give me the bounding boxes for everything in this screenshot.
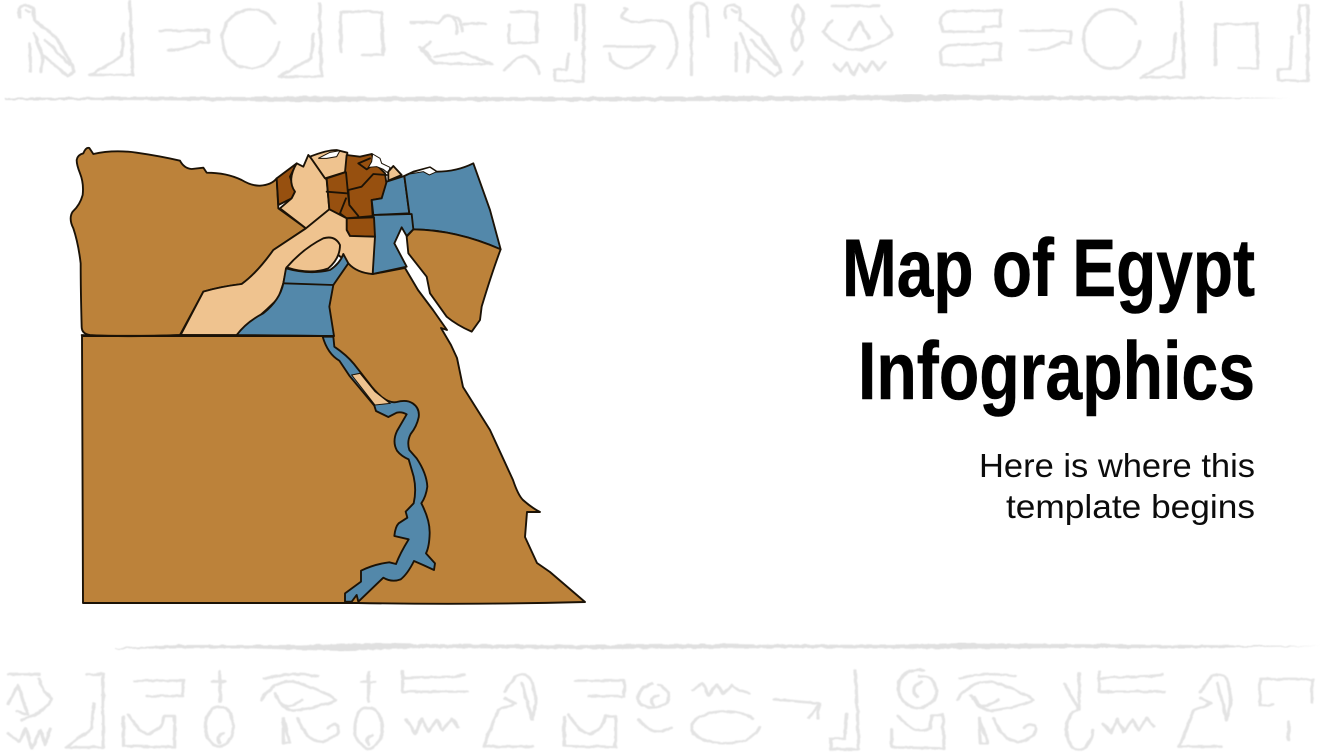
river Nile governorates	[323, 337, 435, 602]
lake	[318, 151, 340, 158]
title	[842, 223, 1255, 417]
map of Egypt	[71, 148, 585, 604]
region: Matrouh	[71, 148, 306, 336]
region: central delta	[327, 154, 387, 218]
region: South Sinai	[407, 229, 501, 332]
glyph: leg	[831, 670, 859, 749]
glyph: spiral and cup	[638, 683, 671, 731]
lagoon	[368, 154, 390, 173]
subtitle: template begins	[1006, 488, 1255, 525]
glyph: hand and boat	[411, 16, 492, 64]
glyph: leg	[90, 2, 133, 75]
glyph: box	[1260, 679, 1312, 740]
boundary line	[82, 335, 334, 336]
delta boundaries	[327, 158, 387, 218]
glyph: box and cup	[124, 681, 183, 747]
title: Infographics	[858, 326, 1255, 417]
region: Alexandria	[277, 163, 297, 205]
region: southern and eastern desert	[82, 263, 585, 604]
glyph: eye of Horus	[958, 674, 1036, 743]
hieroglyph band: bottom	[9, 670, 1312, 750]
glyph: vessel	[823, 6, 892, 75]
region: Beheira	[280, 155, 329, 228]
region: Kafr El Sheikh	[310, 150, 347, 178]
subtitle: Here is where this	[979, 447, 1255, 484]
glyph: column	[1278, 5, 1308, 81]
hieroglyph band: top	[19, 2, 1308, 82]
glyph: leg	[66, 674, 103, 747]
glyph: box and zigzag	[1099, 672, 1164, 733]
glyph: falcon	[19, 5, 75, 77]
glyph: leg	[1141, 2, 1184, 77]
glyph: braid	[792, 5, 803, 75]
lagoon	[407, 167, 437, 175]
glyph: box and cup	[564, 681, 624, 747]
glyph: arrow	[774, 699, 819, 718]
glyph: eye of Horus	[262, 674, 339, 743]
region: Giza	[181, 209, 375, 335]
region: Damietta	[388, 166, 402, 181]
glyph: snake and bowl	[605, 8, 677, 68]
glyph: zigzag and oval	[691, 683, 760, 743]
glyph: box and zigzag	[403, 672, 468, 733]
region: Cairo	[347, 217, 375, 237]
glyph: vessel	[9, 674, 52, 748]
glyph: reed and oval	[1064, 673, 1093, 750]
brush line: top	[5, 94, 1290, 102]
glyph: arm	[1021, 31, 1071, 50]
glyph: oval	[1084, 9, 1140, 68]
glyph: falcon	[726, 5, 781, 77]
subtitle	[979, 447, 1255, 525]
region: Sharqia	[372, 176, 409, 215]
glyph: leg	[279, 3, 322, 77]
region: Fayoum	[287, 237, 340, 271]
glyph: ankh	[205, 672, 233, 747]
region: Suez and Ismailia	[373, 214, 413, 274]
glyph: double mouth	[941, 10, 1000, 65]
glyph: ankh	[354, 672, 383, 749]
glyph: column	[555, 5, 584, 82]
region: North Sinai	[404, 163, 501, 249]
region: Beni Suef	[237, 254, 348, 336]
glyph: column	[691, 3, 708, 75]
glyph: box and arch	[505, 12, 539, 73]
glyph: box	[1215, 24, 1258, 68]
glyph: arm	[160, 31, 209, 50]
region: Sohag strip	[352, 373, 390, 405]
glyph: seated figure	[484, 674, 536, 747]
glyph: box	[341, 12, 383, 55]
glyph: spiral and cup	[892, 670, 944, 748]
glyph: oval	[222, 9, 279, 68]
brush line: bottom	[115, 643, 1320, 651]
glyph: seated figure	[1179, 674, 1231, 747]
